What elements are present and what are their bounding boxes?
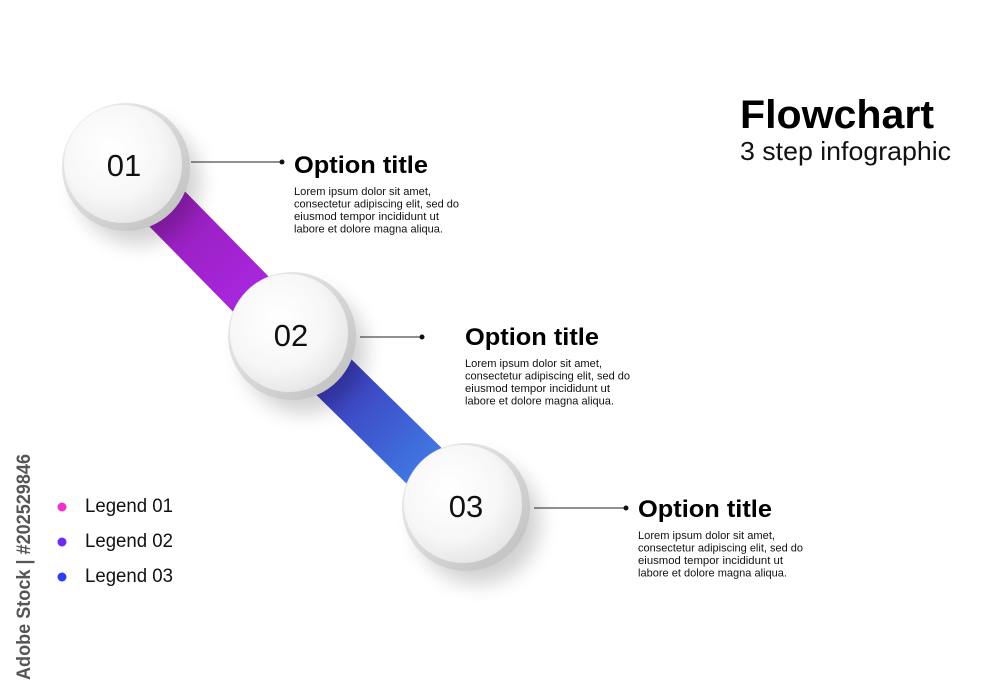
connector bar 2 <box>292 336 466 507</box>
step 01 circle <box>62 103 200 244</box>
step 01 circle: 01 <box>107 148 141 183</box>
step 03 text <box>534 496 803 580</box>
step 01 text: consectetur adipiscing elit, sed do <box>294 198 459 210</box>
step 01 text <box>191 152 459 236</box>
step 03 text: consectetur adipiscing elit, sed do <box>638 542 803 554</box>
step 03 circle: 03 <box>449 489 483 524</box>
legend: Legend 02 <box>85 531 173 552</box>
connector bar 1 <box>126 167 292 336</box>
step 03 text: Lorem ipsum dolor sit amet, <box>638 530 775 542</box>
step 03 circle <box>402 443 540 584</box>
step 01 text: Lorem ipsum dolor sit amet, <box>294 186 431 198</box>
step 02 text <box>360 324 630 408</box>
step 03 text: Option title <box>638 496 772 523</box>
step 01 text: eiusmod tempor incididunt ut <box>294 211 439 223</box>
legend: Legend 01 <box>85 496 173 517</box>
step 02 text: Option title <box>465 324 599 351</box>
step 01 text: Option title <box>294 152 428 179</box>
step 03 text: eiusmod tempor incididunt ut <box>638 555 783 567</box>
title: 3 step infographic <box>740 136 951 166</box>
step 03 text: labore et dolore magna aliqua. <box>638 568 787 580</box>
title: Flowchart <box>740 93 934 137</box>
step 02 text: consectetur adipiscing elit, sed do <box>465 370 630 382</box>
title <box>740 93 951 166</box>
step 02 circle <box>228 272 366 413</box>
legend <box>58 496 173 587</box>
step 01 text: labore et dolore magna aliqua. <box>294 224 443 236</box>
step 02 circle: 02 <box>274 318 308 353</box>
legend: Legend 03 <box>85 566 173 587</box>
step 02 text: labore et dolore magna aliqua. <box>465 396 614 408</box>
step 02 text: Lorem ipsum dolor sit amet, <box>465 358 602 370</box>
watermark id vertical: Adobe Stock | #202529846 <box>14 454 35 680</box>
step 02 text: eiusmod tempor incididunt ut <box>465 383 610 395</box>
